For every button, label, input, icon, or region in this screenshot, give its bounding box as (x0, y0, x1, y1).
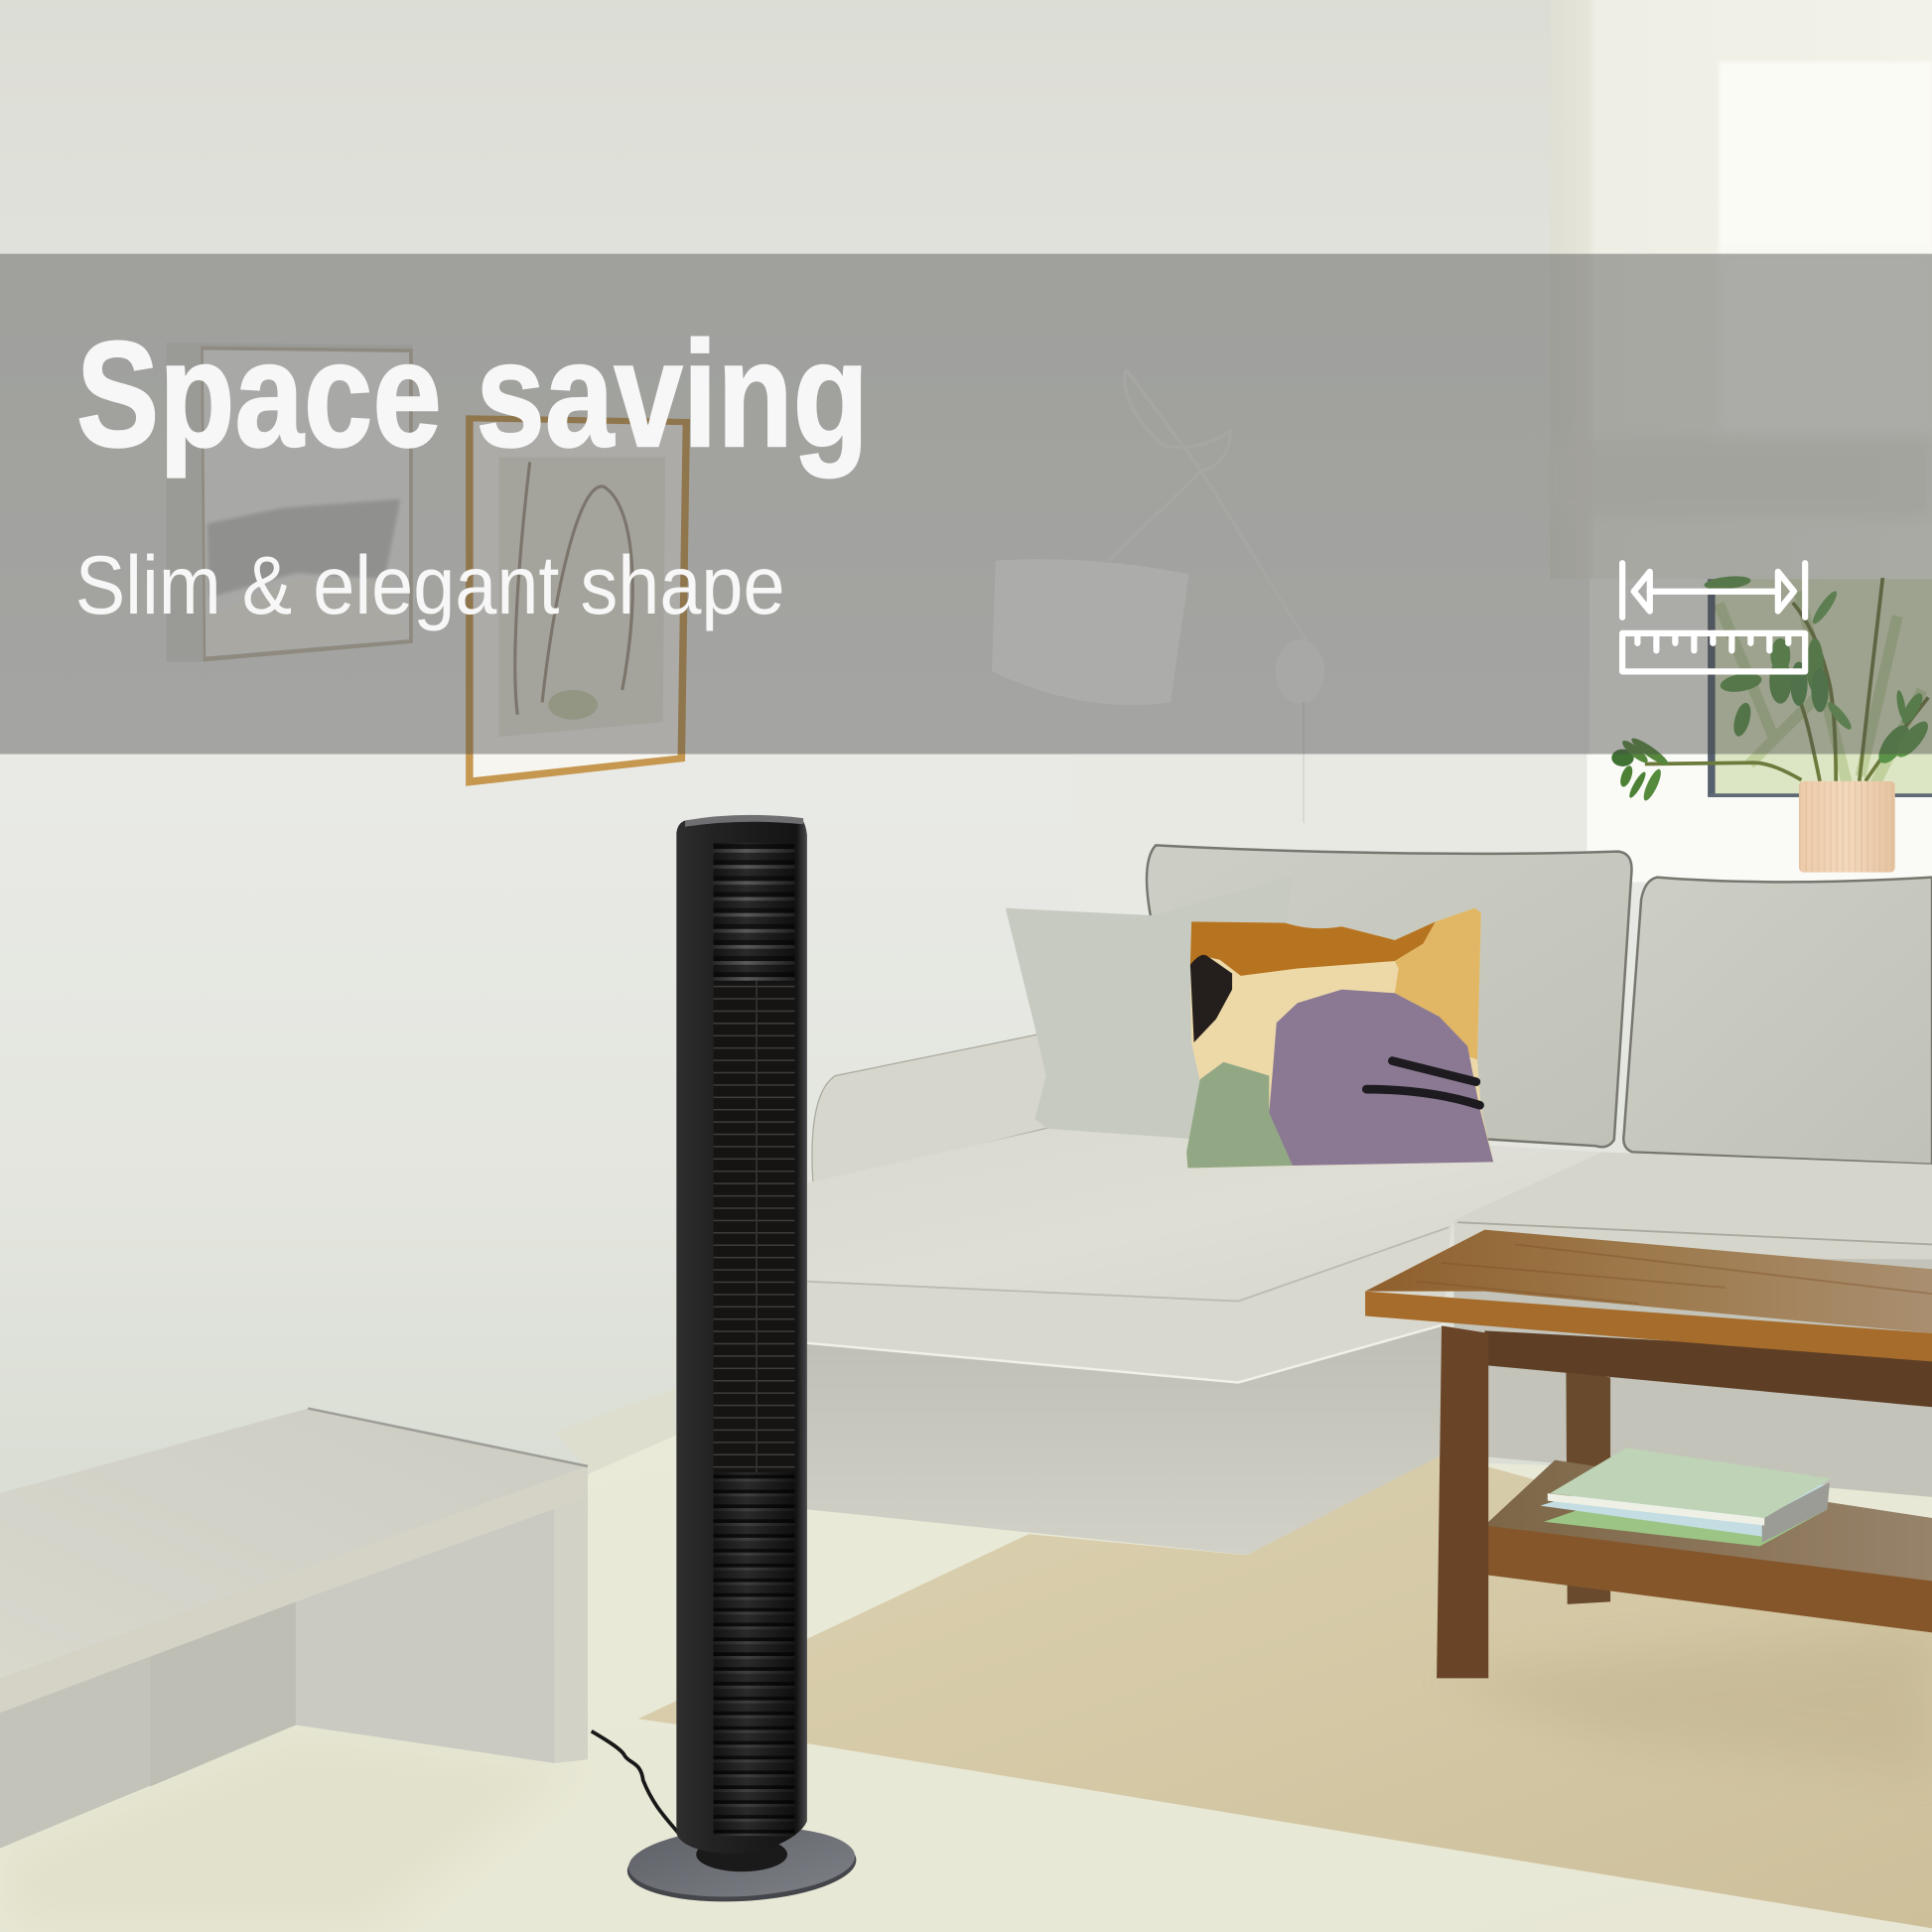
rug (638, 1453, 1932, 1928)
floor shading near bench (0, 1725, 588, 1932)
stitched marks (1366, 1061, 1480, 1105)
fan base (625, 1822, 858, 1907)
sofa back cushions (1147, 845, 1932, 1165)
plant and pot (1611, 574, 1932, 873)
window and curtain (1540, 0, 1932, 797)
front leg (1437, 1325, 1488, 1678)
wall picture: abstract plant (466, 415, 690, 786)
table shelf (1484, 1460, 1932, 1632)
wall picture: grey landscape (167, 343, 413, 661)
grey pillow (1006, 876, 1293, 1139)
title: Space saving (76, 311, 869, 479)
colourful pillow (1186, 908, 1493, 1169)
middle grille (714, 981, 794, 1472)
back leg (1566, 1368, 1610, 1604)
sofa (807, 845, 1932, 1555)
stacked books (1540, 1448, 1831, 1547)
grey banner (0, 254, 1932, 755)
sofa armrest (812, 1033, 1049, 1185)
icon: ruler with width arrow (1622, 563, 1805, 671)
orange patch (1190, 921, 1436, 976)
power cord (592, 1731, 678, 1832)
bench (0, 1409, 588, 1849)
table rail (1484, 1330, 1932, 1407)
chaise seat (807, 1129, 1601, 1555)
green patch (1186, 1062, 1293, 1169)
table top (1365, 1230, 1932, 1333)
fan top cap (685, 815, 803, 827)
wall lamp (992, 369, 1324, 823)
lower grille (714, 1472, 794, 1836)
coffee table (1365, 1230, 1932, 1678)
purple patch (1269, 990, 1493, 1166)
tower fan (592, 815, 858, 1907)
upper grille (714, 843, 794, 981)
right seat (1453, 1152, 1932, 1497)
black patch (1190, 955, 1232, 1042)
subtitle: Slim & elegant shape (75, 539, 785, 631)
yellow patch (1395, 908, 1481, 1059)
fan column (676, 816, 807, 1854)
